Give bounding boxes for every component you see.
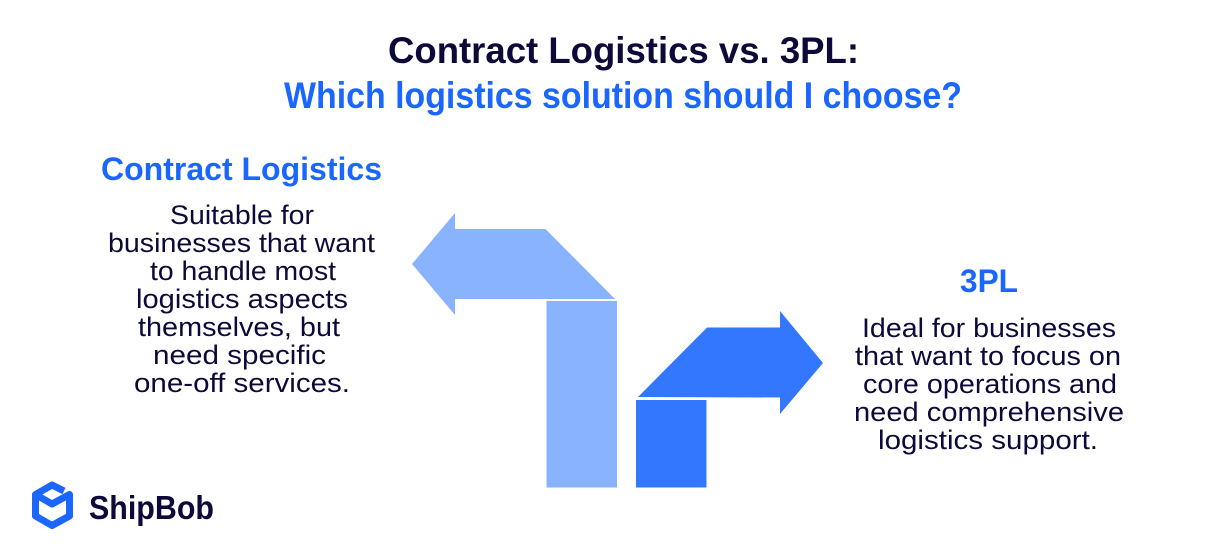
title (284, 30, 962, 116)
title: Contract Logistics vs. 3PL: (388, 30, 859, 71)
heading: 3PL: 3PL (960, 263, 1018, 299)
text block: 3PL description: need comprehensive (854, 397, 1124, 427)
text block: 3PL description: that want to focus on (855, 341, 1121, 371)
text block: 3PL description: logistics support. (878, 425, 1098, 455)
text block: contract logistics description: to handle most (150, 256, 337, 286)
text block: contract logistics description: one-off services. (134, 368, 350, 398)
text block: contract logistics description: businesses that want (108, 228, 376, 258)
text block: contract logistics description: need specific (153, 340, 326, 370)
icon: hexagonal box (36, 485, 70, 526)
text block: 3PL description (854, 313, 1124, 455)
panel: 3PL (854, 263, 1124, 455)
logo: ShipBob (36, 485, 214, 526)
arrow: light blue left turn (412, 213, 617, 488)
text block: 3PL description: core operations and (863, 369, 1117, 399)
title: Which logistics solution should I choose? (284, 75, 962, 116)
text block: contract logistics description: themselves, but (138, 312, 341, 342)
heading: contract logistics: Contract Logistics (101, 151, 382, 187)
arrow: blue right turn (636, 311, 823, 488)
text block: contract logistics description: Suitable for (170, 200, 314, 230)
panel: contract logistics (101, 151, 382, 398)
text block: 3PL description: Ideal for businesses (862, 313, 1116, 343)
text block: contract logistics description: logistics aspects (136, 284, 348, 314)
logo wordmark: ShipBob (89, 489, 214, 526)
text block: contract logistics description (108, 200, 376, 398)
